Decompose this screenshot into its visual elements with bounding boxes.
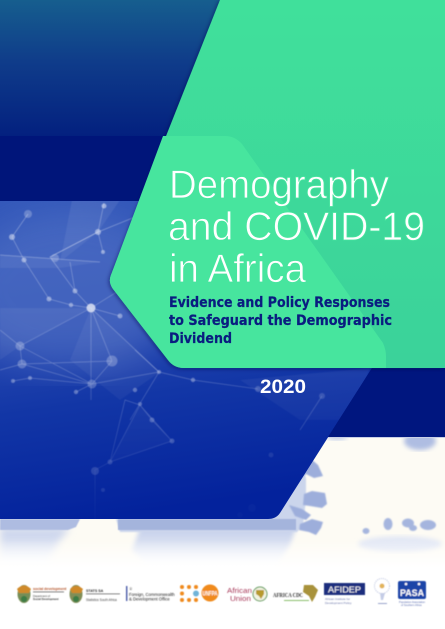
logo: foreign office: & Development Office [129,596,170,602]
navy band left [0,136,200,206]
subtitle: Dividend [169,331,232,347]
logo: Africa CDC [273,585,318,602]
logo: AFIDEP: AFIDEP [328,584,361,594]
logo: AFIDEP: Development Policy [325,601,352,605]
lower fading bodies [0,528,70,566]
logo: PASA [398,581,426,607]
logo: foreign office: Foreign, Commonwealth [129,592,175,597]
logo: UNFPA [180,584,218,602]
pale body of central virus [116,460,306,532]
partner logos [17,578,426,607]
tinted strip below blue panel [118,519,296,530]
title: and COVID-19 [168,205,425,249]
subtitle: to Safeguard the Demographic [169,313,392,329]
subtitle: Evidence and Policy Responses [169,295,390,311]
logo: stats sa [70,585,120,603]
navy band right [300,360,445,437]
logo: stats sa: STATS SA [86,589,104,593]
logo: social development: social development [33,587,67,591]
logo: PASA: PASA [400,588,424,598]
logo: African Union [227,587,267,603]
logo: African Union: Union [230,596,251,603]
subtitle [169,295,392,347]
logo: PASA: Population Association [399,600,426,604]
top blue panel [0,0,240,137]
right virus [362,518,436,534]
logo: stats sa: Statistics South Africa [86,598,117,602]
logo: foreign office: ♕ [129,586,133,591]
logo: Africa CDC: AFRICA CDC [273,592,303,599]
lighter inner shape [110,136,386,368]
title: in Africa [169,247,307,291]
white fade to footer [0,540,445,568]
logo: social development: Social Development [33,597,59,601]
logo: UNFPA: UNFPA [202,590,218,598]
cream background [0,430,445,629]
spike clumps [289,458,327,535]
title [168,163,425,291]
logo: social development [17,585,67,603]
light rule at navy band bottom [328,437,445,438]
title: Demography [169,163,389,207]
green title panel [110,0,445,368]
logo: UAPS seal [374,578,390,604]
logo: social development: Department of [33,594,50,598]
logo: African Union: African [227,588,252,595]
logo: AFIDEP [324,583,365,605]
logo: foreign office [126,586,175,602]
logo: AFIDEP: African Institute for [325,597,350,601]
logo: PASA: of Southern Africa [401,603,422,607]
year: 2020 [260,377,306,398]
virus particles [0,432,442,568]
photo panel: network [0,201,372,519]
navy sliver under green panel [328,368,445,437]
